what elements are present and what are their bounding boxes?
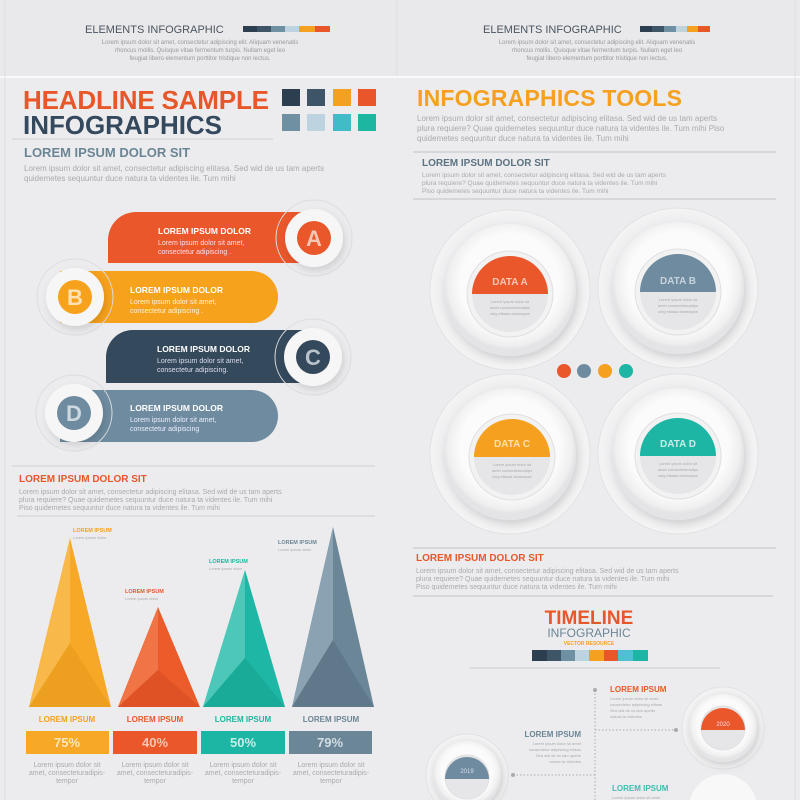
timeline: Lorem ipsum dolor sit amet <box>612 795 661 800</box>
percentage boxes: Lorem ipsum dolor sit <box>298 762 365 769</box>
timeline title: TIMELINE <box>545 608 633 629</box>
header: elements infographic left: ELEMENTS INFOGRAPHIC <box>85 24 224 36</box>
triangle chart: Lorem ipsum dolor <box>278 547 312 552</box>
percentage boxes: amet, consecteturadipis- <box>293 770 370 777</box>
percentage boxes: tempor <box>56 778 79 785</box>
data circle C: Lorem ipsum dolor sit <box>493 462 532 467</box>
ribbon D: LOREM IPSUM DOLOR <box>130 403 223 413</box>
title: infographics tools <box>417 85 725 143</box>
data circle A <box>430 210 590 370</box>
ribbon C: C <box>305 345 321 370</box>
percentage boxes: LOREM IPSUM <box>127 715 184 724</box>
subheading right: Lorem ipsum dolor sit amet, consectetur adipiscing elitasa. Sed wid de us tam aperts <box>422 172 667 179</box>
timeline: LOREM IPSUM <box>612 784 669 793</box>
timeline title <box>532 608 648 661</box>
timeline: LOREM IPSUM <box>525 730 581 739</box>
percentage boxes: Lorem ipsum dolor sit <box>210 762 277 769</box>
subheading right: plura requiere? Quae quidemetes sequuntur duce natura ta videntes ile. Tum mihi <box>422 180 657 187</box>
section heading right lower <box>416 553 679 591</box>
header: elements infographic right: feugiat libero elementum porttitor tristique non lectus. <box>526 56 668 62</box>
title: infographics tools: INFOGRAPHICS TOOLS <box>417 85 682 111</box>
ribbon A: A <box>306 226 322 251</box>
data circle D: cing elitasa deamapse <box>658 473 699 478</box>
timeline: consectetur adipiscing elitsas <box>610 702 662 707</box>
timeline: 2019 <box>460 769 474 775</box>
ribbon D: Lorem ipsum dolor sit amet, <box>130 417 216 424</box>
timeline: Sed wid de us tam aperts <box>536 753 581 758</box>
timeline: LOREM IPSUM <box>610 685 667 694</box>
header: elements infographic right <box>483 24 710 62</box>
data circle A: DATA A <box>492 277 528 288</box>
timeline title: VECTOR RESOURCE <box>564 641 615 647</box>
subheading left: LOREM IPSUM DOLOR SIT <box>24 145 190 160</box>
section heading: lorem ipsum dolor sit <box>19 474 282 512</box>
triangle chart: Lorem ipsum dolor <box>73 535 107 540</box>
triangle chart: Lorem ipsum dolor <box>125 596 159 601</box>
percentage boxes: 75% <box>54 735 80 750</box>
ribbon B: B <box>67 285 83 310</box>
header: elements infographic left: Lorem ipsum dolor sit amet, consectetur adipiscing elit. Aliquam venenatis <box>102 40 298 46</box>
title: infographics tools: plura requiere? Quae quidemetes sequuntur duce natura ta videntes ile. Tum mihi Piso <box>417 124 725 133</box>
data circle C <box>430 374 590 534</box>
section heading right lower: Piso quidemetes sequuntur duce natura ta videntes ile. Tum mihi <box>416 584 617 591</box>
section heading: lorem ipsum dolor sit: plura requiere? Quae quidemetes sequuntur duce natura ta videntes ile. Tum mihi <box>19 497 273 504</box>
section heading right lower: LOREM IPSUM DOLOR SIT <box>416 553 544 564</box>
percentage boxes: LOREM IPSUM <box>215 715 272 724</box>
ribbon B <box>37 259 278 335</box>
percentage boxes: 40% <box>142 735 168 750</box>
percentage boxes: Lorem ipsum dolor sit <box>122 762 189 769</box>
percentage boxes: amet, consecteturadipis- <box>117 770 194 777</box>
percentage boxes: amet, consecteturadipis- <box>29 770 106 777</box>
ribbon C: Lorem ipsum dolor sit amet, <box>157 358 243 365</box>
percentage boxes: amet, consecteturadipis- <box>205 770 282 777</box>
triangle chart: LOREM IPSUM <box>209 559 248 565</box>
section heading right lower: Lorem ipsum dolor sit amet, consectetur adipiscing elitasa. Sed wid de us tam aperts <box>416 568 679 575</box>
subheading right: LOREM IPSUM DOLOR SIT <box>422 158 550 169</box>
triangle chart <box>29 527 374 707</box>
data circle D: DATA D <box>660 439 696 450</box>
timeline: 2020 <box>716 722 730 728</box>
timeline: natura ta videntes <box>549 759 581 764</box>
ribbon A: Lorem ipsum dolor sit amet, <box>158 240 244 247</box>
header: elements infographic left: rhoncus mollis. Quisque vitae fermentum turpis. Nullam eget leo <box>115 48 286 54</box>
section heading: lorem ipsum dolor sit: LOREM IPSUM DOLOR SIT <box>19 474 147 485</box>
ribbon A: consectetur adipiscing . <box>158 249 231 256</box>
section heading right lower: plura requiere? Quae quidemetes sequuntur duce natura ta videntes ile. Tum mihi <box>416 576 670 583</box>
title: headline sample infographics: INFOGRAPHICS <box>23 110 222 140</box>
data circle A: cing elitasa deamapse <box>490 311 531 316</box>
timeline: Lorem ipsum dolor sit amet <box>610 696 659 701</box>
subheading left <box>24 145 324 183</box>
subheading left: quidemetes sequuntur duce natura ta videntes ile. Tum mihi <box>24 174 236 183</box>
subheading right <box>422 158 667 195</box>
header: elements infographic left <box>85 24 330 62</box>
ribbon D: consectetur adipiscing <box>130 426 199 433</box>
section heading: lorem ipsum dolor sit: Lorem ipsum dolor sit amet, consectetur adipiscing elitasa. Sed wid de us tam aperts <box>19 489 282 496</box>
percentage boxes: tempor <box>144 778 167 785</box>
percentage boxes: 50% <box>230 735 256 750</box>
ribbon C: consectetur adipiscing. <box>157 367 228 374</box>
triangle chart: LOREM IPSUM <box>278 540 317 546</box>
header: elements infographic right: Lorem ipsum dolor sit amet, consectetur adipiscing elit. Aliquam venenatis <box>499 40 695 46</box>
subheading right: Piso quidemetes sequuntur duce natura ta videntes ile. Tum mihi <box>422 188 608 195</box>
data circle D: amet consecteturadips <box>658 467 698 472</box>
data circle B: Lorem ipsum dolor sit <box>659 297 698 302</box>
triangle chart: LOREM IPSUM <box>125 589 164 595</box>
section heading: lorem ipsum dolor sit: Piso quidemetes sequuntur duce natura ta videntes ile. Tum mihi <box>19 505 220 512</box>
title: headline sample infographics: HEADLINE SAMPLE <box>23 85 269 115</box>
timeline: Lorem ipsum dolor sit amet <box>533 741 582 746</box>
data circle C: cing elitasa deamapse <box>492 474 533 479</box>
ribbon D <box>36 375 278 451</box>
header: elements infographic right: ELEMENTS INFOGRAPHIC <box>483 24 622 36</box>
timeline: natura ta videntes <box>610 714 642 719</box>
data circle D <box>598 374 758 534</box>
percentage boxes: tempor <box>232 778 255 785</box>
ribbon C: LOREM IPSUM DOLOR <box>157 344 250 354</box>
title: infographics tools: quidemetes sequuntur duce natura ta videntes ile. Tum mihi <box>417 134 629 143</box>
data circle A: Lorem ipsum dolor sit <box>491 299 530 304</box>
timeline <box>426 685 764 800</box>
triangle chart: Lorem ipsum dolor <box>209 566 243 571</box>
data circle C: amet consecteturadips <box>492 468 532 473</box>
title: headline sample infographics <box>23 85 269 140</box>
ribbon B: Lorem ipsum dolor sit amet, <box>130 299 216 306</box>
ribbon A: LOREM IPSUM DOLOR <box>158 226 251 236</box>
timeline: Sed wid de us tam aperts <box>610 708 655 713</box>
data circle B <box>598 208 758 368</box>
ribbon B: LOREM IPSUM DOLOR <box>130 285 223 295</box>
title: infographics tools: Lorem ipsum dolor sit amet, consectetur adipiscing elitasa. Sed wid de us tam aperts <box>417 114 717 123</box>
ribbon C <box>106 319 351 395</box>
percentage boxes: LOREM IPSUM <box>39 715 96 724</box>
percentage boxes <box>26 715 372 785</box>
data circle D: Lorem ipsum dolor sit <box>659 461 698 466</box>
data circle B: amet consecteturadips <box>658 303 698 308</box>
timeline title: INFOGRAPHIC <box>547 626 631 640</box>
ribbon A <box>108 200 352 276</box>
ribbon B: consectetur adipiscing . <box>130 308 203 315</box>
percentage boxes: 79% <box>317 735 343 750</box>
colour swatches <box>282 89 376 131</box>
data circle A: amet consecteturadips <box>490 305 530 310</box>
data circle C: DATA C <box>494 439 530 450</box>
header: elements infographic right: rhoncus mollis. Quisque vitae fermentum turpis. Nullam eget leo <box>512 48 683 54</box>
percentage boxes: LOREM IPSUM <box>303 715 360 724</box>
triangle chart: LOREM IPSUM <box>73 528 112 534</box>
data circle B: DATA B <box>660 276 696 287</box>
ribbon D: D <box>66 401 82 426</box>
header: elements infographic left: feugiat libero elementum porttitor tristique non lectus. <box>129 56 271 62</box>
color dots <box>557 364 633 378</box>
subheading left: Lorem ipsum dolor sit amet, consectetur adipiscing elitasa. Sed wid de us tam aperts <box>24 164 324 173</box>
timeline: consectetur adipiscing elitsas <box>529 747 581 752</box>
percentage boxes: Lorem ipsum dolor sit <box>34 762 101 769</box>
percentage boxes: tempor <box>320 778 343 785</box>
data circle B: cing elitasa deamapse <box>658 309 699 314</box>
